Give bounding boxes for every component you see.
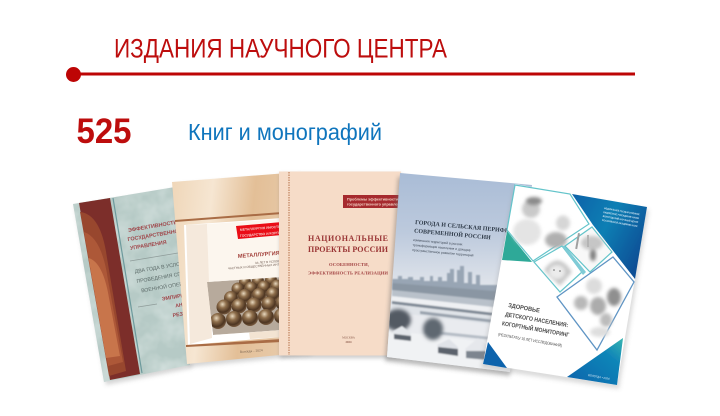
book 3: national projects: ПРОЕКТЫ РОССИИ — [308, 245, 389, 254]
book 5 title — [498, 302, 573, 349]
red publisher badge: ГОСУДАРСТВО И КОРПОРАЦИИ — [240, 230, 294, 238]
stat label: Книг и монографий — [188, 119, 382, 145]
book 3: national projects: 2024 — [346, 340, 352, 344]
photo panel: baby — [534, 246, 582, 292]
photo panel: family — [557, 257, 634, 350]
book fan — [73, 172, 649, 389]
book 3: national projects — [279, 172, 404, 358]
book 1: public administration effectiveness: ПРОВЕДЕНИЯ СПЕЦИАЛЬНОЙ — [136, 264, 214, 285]
stat number: 525 — [76, 112, 132, 151]
red series badge — [343, 195, 404, 208]
red publisher badge — [236, 222, 294, 239]
book 1: public administration effectiveness: ЭФФЕКТИВНОСТЬ — [128, 220, 178, 234]
blue corner top right — [572, 194, 647, 279]
book 5 title: ЗДОРОВЬЕ — [508, 303, 540, 315]
teal triangle — [502, 231, 532, 262]
book 1: public administration effectiveness: ЭМПИРИЧЕСКИЙ — [161, 287, 206, 303]
red series badge: государственного управления — [347, 202, 404, 206]
book 5 title: (РЕЗУЛЬТАТЫ 10 ЛЕТ ИССЛЕДОВАНИЙ) — [498, 332, 563, 348]
blue corner top right: БЮДЖЕТНОЕ УЧРЕЖДЕНИЕ НАУКИ — [603, 211, 639, 220]
blue corner bottom left — [483, 342, 507, 368]
photo panel: doctor and child — [507, 185, 589, 261]
book 4: cities and rural periphery: СОВРЕМЕННОЙ РОССИИ — [414, 227, 491, 241]
book 3: national projects: МОСКВА — [342, 336, 356, 340]
book 1: public administration effectiveness: ГОСУДАРСТВЕННОГО — [127, 227, 186, 243]
book 2: metallurgy: МЕТАЛЛУРГИЯ В РОССИИ — [238, 248, 311, 260]
blue corner top right: РОССИЙСКОЙ АКАДЕМИИ НАУК — [602, 219, 638, 228]
book 1: public administration effectiveness: ДВА ГОДА В УСЛОВИЯХ — [135, 259, 195, 275]
book 3: national projects: ОСОБЕННОСТИ, — [329, 262, 369, 267]
title rule with dot — [66, 67, 635, 82]
book 4: cities and rural periphery: изменения территорий в россии: — [413, 238, 463, 247]
red series badge: Проблемы эффективности — [347, 198, 399, 202]
photo: metal balls — [207, 277, 279, 335]
book 5 title: ДЕТСКОГО НАСЕЛЕНИЯ: — [505, 312, 569, 329]
red publisher badge: МЕТАЛЛУРГИЯ ИНОСТРАННЫХ — [240, 224, 294, 232]
blue corner bottom right: ВОЛОГДА • 2024 — [588, 373, 610, 381]
book 1: public administration effectiveness: АНАЛИЗ — [175, 300, 198, 310]
book 1: public administration effectiveness: ВОЕННОЙ ОПЕРАЦИИ — [140, 277, 198, 294]
book 1: public administration effectiveness: УПРАВЛЕНИЯ — [130, 240, 167, 252]
photo panel: factory — [565, 227, 612, 272]
book 1: public administration effectiveness: РЕЗУЛЬТАТЫ — [172, 307, 207, 319]
blue corner top right: ФЕДЕРАЛЬНОЕ ГОСУДАРСТВЕННОЕ — [604, 207, 640, 216]
teal divider strip — [562, 246, 586, 275]
title: ИЗДАНИЯ НАУЧНОГО ЦЕНТРА — [114, 34, 447, 64]
book 5: children's health — [481, 184, 649, 389]
blue corner top right: ВОЛОГОДСКИЙ НАУЧНЫЙ ЦЕНТР — [602, 215, 639, 224]
book 4: cities and rural periphery: ГОРОДА И СЕЛЬСКАЯ ПЕРИФЕРИЯ — [415, 220, 522, 236]
book 2: metallurgy: ЗА ЛЕТ В УСЛОВИЯХ — [255, 259, 286, 265]
book 3: national projects: ЭФФЕКТИВНОСТЬ РЕАЛИЗАЦИИ — [308, 270, 388, 276]
book 2: metallurgy — [172, 172, 312, 367]
book 2: metallurgy: ЧАСТНЫХ И ОБЩЕСТВЕННЫХ ИНТЕРЕСОВ — [228, 261, 292, 270]
book 4: cities and rural periphery: пространственное развитие территорий — [412, 248, 474, 258]
illustration: skyline and snowy fields — [387, 265, 510, 372]
book 4: cities and rural periphery — [384, 173, 532, 376]
book 3: national projects: НАЦИОНАЛЬНЫЕ — [308, 234, 388, 243]
book 5 title: КОГОРТНЫЙ МОНИТОРИНГ — [501, 319, 570, 339]
book 2: metallurgy: Вологда – 2024 — [240, 348, 263, 354]
book 1: public administration effectiveness — [73, 187, 216, 385]
blue corner bottom right — [567, 338, 623, 385]
book 4: cities and rural periphery: трансформация населения и доходов — [412, 243, 471, 252]
